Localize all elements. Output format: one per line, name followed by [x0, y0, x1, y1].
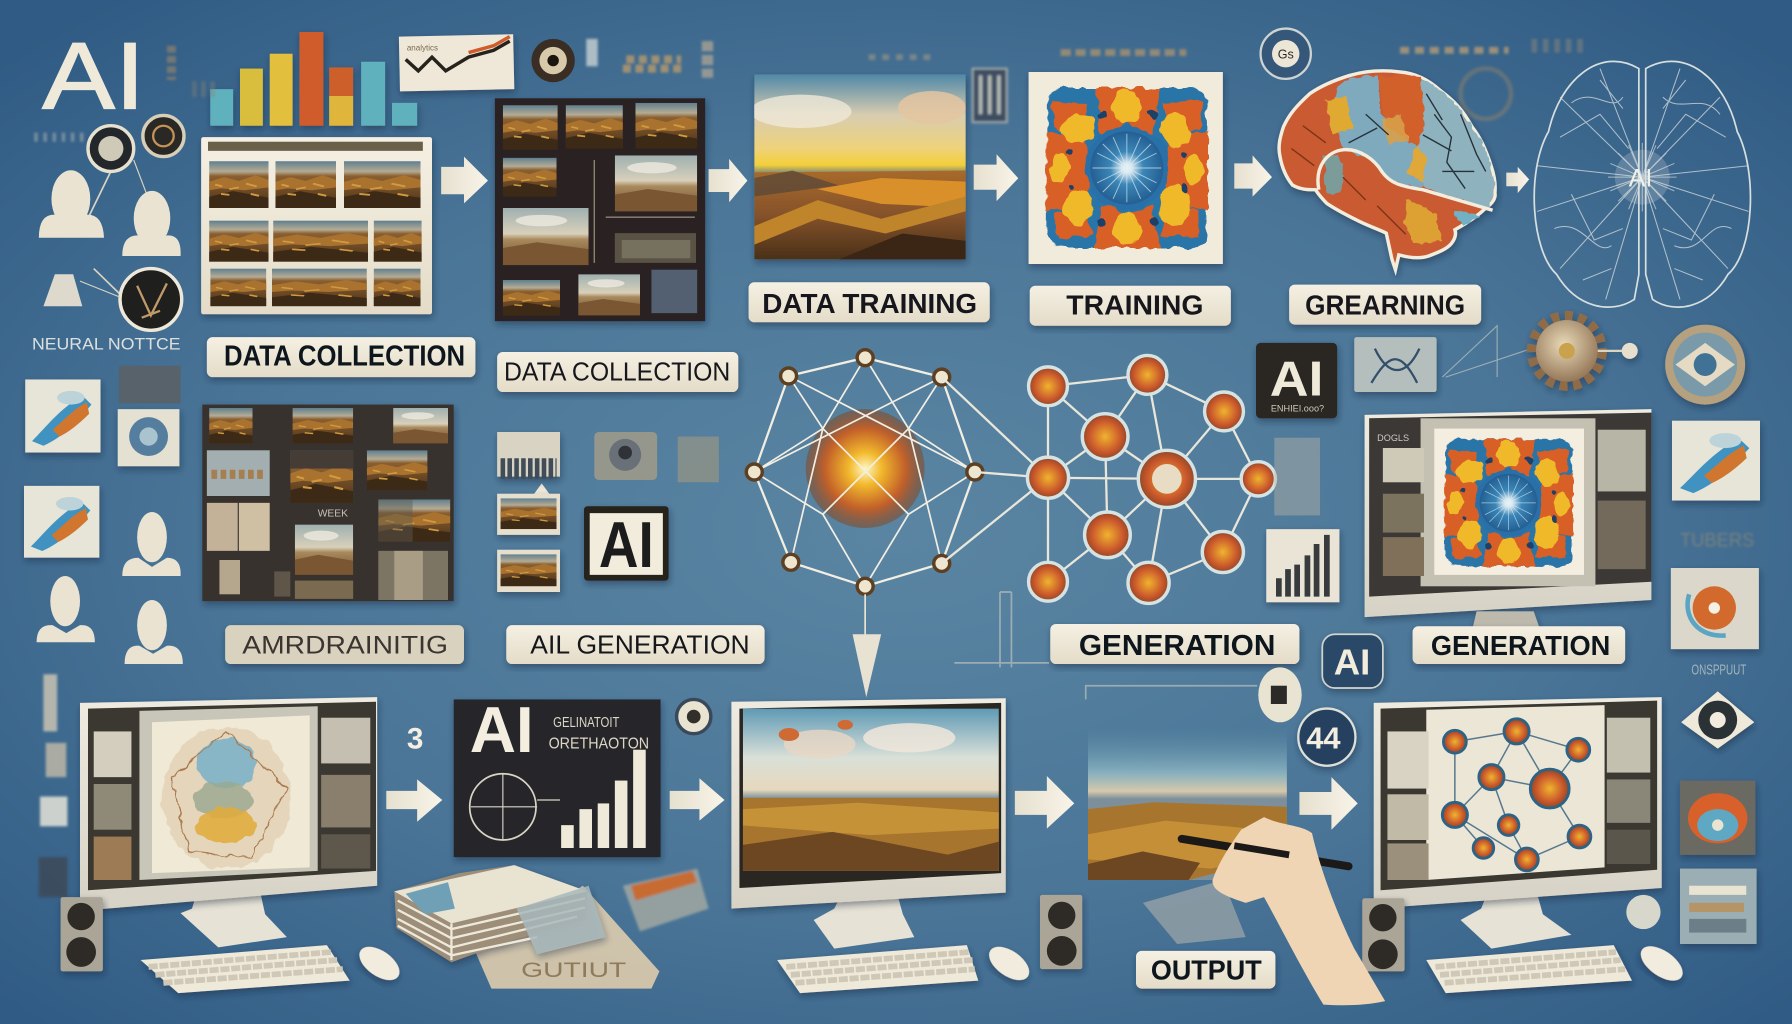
decorative icons: top row: [34, 39, 1589, 137]
panel: dark mosaic: [202, 405, 454, 601]
label: data training: [749, 282, 990, 322]
arrow: [670, 778, 725, 821]
number 3: 3: [407, 723, 423, 756]
monitor: mandala on screen: DOGLS: [1377, 433, 1409, 443]
chart card: bars: [1266, 529, 1339, 602]
icon: gear: [1531, 315, 1638, 386]
monitor: splash art: [80, 697, 377, 947]
arrow down: [853, 594, 881, 697]
badge: 44: 44: [1306, 721, 1341, 756]
network: sun neural net: [746, 350, 983, 594]
small book stack: [623, 869, 709, 931]
card: AI generation chalkboard: [454, 693, 661, 857]
label: training: TRAINING: [1066, 289, 1203, 320]
label: output: OUTPUT: [1151, 954, 1262, 985]
label: output: [1136, 951, 1275, 989]
arrow: [386, 779, 442, 822]
books stack: [475, 886, 659, 989]
arrow: [709, 159, 747, 202]
mouse middle: [983, 940, 1035, 987]
badge: AI: [1322, 634, 1383, 688]
icon: network of users top left: [39, 115, 184, 330]
badge: AI: AI: [1334, 641, 1370, 682]
label: generation right: [1413, 626, 1625, 664]
speaker left: [61, 897, 103, 971]
icon: eye disc: [1665, 325, 1745, 405]
badge: small: [1258, 667, 1302, 722]
illustration: brain: [1279, 71, 1495, 270]
icon: gear camera: [594, 432, 719, 482]
blurred text: TUBERS: [1680, 529, 1754, 551]
monitor: mandala on screen: [1365, 409, 1651, 631]
hand with pen: [1182, 817, 1385, 1005]
card: AI generation chalkboard: ORETHAOTON: [549, 736, 649, 753]
sketch network: [1442, 719, 1591, 871]
connector lines: [954, 592, 1257, 699]
left tools strip: [39, 674, 67, 897]
illustration: wireframe brain: [1534, 61, 1750, 307]
panel: image gallery: [201, 137, 432, 314]
caption: neural notice: NEURAL NOTTCE: [32, 335, 181, 354]
label: amrdrainitig: [225, 625, 464, 664]
translucent panel: [1274, 438, 1320, 515]
icon: eye: [1681, 691, 1754, 749]
label: data collection regular: DATA COLLECTION: [504, 357, 730, 387]
label: amrdrainitig: AMRDRAINITIG: [242, 632, 448, 660]
card: line chart: analytics: [407, 43, 438, 52]
chart: colored bars: [210, 32, 417, 126]
card: dna: [1354, 337, 1437, 392]
label: grearning: GREARNING: [1305, 289, 1465, 320]
badge: 44: [1298, 709, 1355, 766]
decorative knot: [1626, 895, 1661, 929]
arrow: [1506, 167, 1529, 193]
card: AI dark: [1256, 343, 1337, 418]
panel: dark collage: [495, 98, 705, 321]
network: image nodes: [942, 355, 1275, 603]
card: colored eye: [1680, 781, 1755, 855]
icon: badge top: Gs: [1278, 47, 1294, 61]
left column: art cards: [24, 366, 181, 558]
label: generation center: [1050, 624, 1299, 664]
card: AI generation chalkboard: AI: [470, 693, 534, 766]
card: line chart: [399, 34, 514, 91]
caption: output faded: ONSPPUUT: [1691, 662, 1746, 678]
thumbnails column: [497, 432, 560, 592]
monitor: landscape: [731, 698, 1006, 949]
arrow: [1299, 777, 1358, 830]
mouse right: [1635, 939, 1689, 987]
poster: mandala art: [1029, 72, 1223, 264]
art card eye: [1671, 568, 1759, 649]
card: AI dark: ENHIEI.ooo?: [1271, 403, 1324, 413]
badge: camera: [677, 699, 711, 734]
label: ail generation: AIL GENERATION: [530, 630, 750, 660]
label: ail generation: [506, 625, 765, 664]
card: AI dark: AI: [1270, 352, 1323, 406]
arrow: [1015, 776, 1074, 829]
art: splash: [162, 727, 290, 869]
image: sunset landscape: [750, 74, 966, 259]
mouse left: [353, 940, 405, 987]
books: [394, 865, 606, 962]
arrow: [1234, 155, 1272, 197]
diagram lines: [1442, 326, 1531, 377]
brain center label: AI: [1629, 164, 1652, 192]
people icons: [37, 512, 183, 664]
panel: dark mosaic: WEEK: [318, 509, 348, 520]
card: dashboard: [1680, 869, 1757, 944]
speaker right: [1362, 898, 1405, 971]
arrow-diamond: [533, 483, 551, 512]
monitor: network sketch: [1374, 697, 1662, 949]
art cards right: [1672, 421, 1760, 501]
label: training: [1030, 286, 1231, 326]
keyboard middle: [777, 945, 978, 993]
title: AI: AI: [42, 24, 145, 130]
arrow: [441, 157, 488, 203]
label: generation right: GENERATION: [1431, 630, 1610, 661]
image: fading landscape: [1088, 727, 1287, 880]
icon: lens disc: [531, 39, 575, 82]
caption: output on card: GUTIUT: [521, 957, 626, 982]
label: generation center: GENERATION: [1079, 630, 1275, 662]
card: AI generation chalkboard: GELINATOIT: [553, 715, 619, 731]
stand ghost: [1143, 880, 1246, 944]
arrow: [974, 154, 1018, 201]
speaker middle: [1040, 895, 1082, 969]
icon: film strip: [973, 69, 1007, 122]
keyboard right: [1426, 945, 1632, 993]
keyboard left: [141, 945, 350, 993]
label: grearning: [1289, 285, 1481, 325]
card: AI square: AI: [599, 508, 654, 581]
label: data training: DATA TRAINING: [762, 288, 977, 319]
icon: badge top: [1261, 29, 1311, 79]
label: data collection bold: DATA COLLECTION: [224, 341, 465, 373]
brain center label: [1615, 150, 1670, 205]
